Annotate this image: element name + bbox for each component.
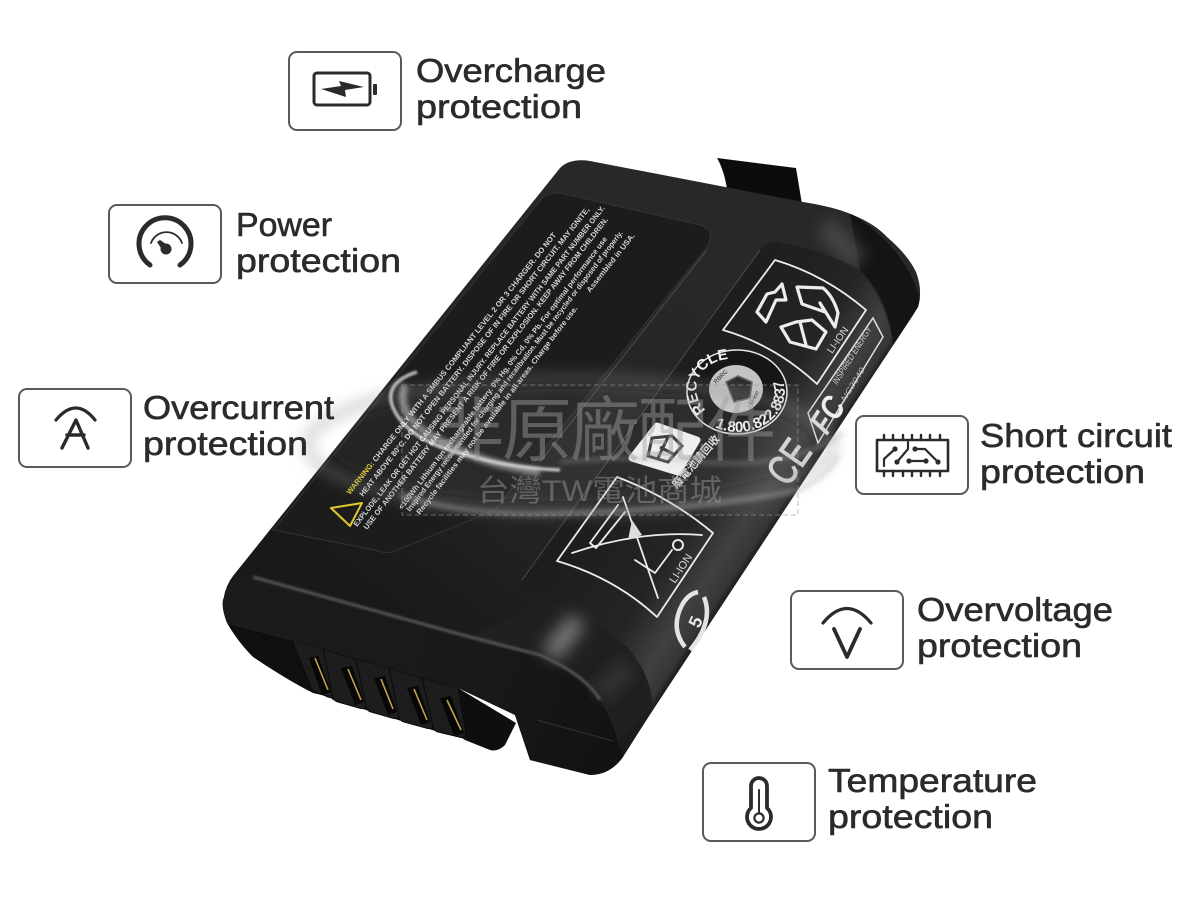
label bbox=[416, 52, 606, 125]
connector teeth bbox=[292, 640, 466, 738]
label: Overcurrent bbox=[143, 389, 334, 426]
icon: ampere bbox=[56, 408, 95, 448]
connector slots bbox=[309, 656, 464, 736]
icon box bbox=[19, 389, 131, 467]
RBRC recycle seal: Li-ion bbox=[749, 390, 761, 406]
label: Overcharge bbox=[416, 52, 606, 89]
label bbox=[236, 206, 401, 279]
warning triangle bbox=[331, 503, 362, 526]
label edge highlights bbox=[522, 250, 760, 580]
battery strap tab bbox=[717, 158, 802, 204]
connector block bbox=[292, 640, 516, 750]
warning text on label: Assembled in USA. bbox=[585, 231, 637, 294]
feature: power protection bbox=[109, 205, 401, 283]
certification label panel bbox=[520, 242, 893, 707]
lower seam line bbox=[537, 720, 613, 741]
label: Power bbox=[236, 206, 332, 243]
warning text on label: <100Wh Lithium Ion rechargeable battery. 0% Hg, 0% Cd, 0% Pb. For optimal performance use bbox=[396, 235, 609, 511]
icon: voltage bbox=[823, 608, 871, 657]
CE mark: CE bbox=[757, 430, 821, 493]
FCC certification box: NC2040 bbox=[839, 365, 867, 403]
watermark main text: 非原廠配件 bbox=[434, 392, 776, 470]
label bbox=[143, 389, 334, 462]
battery body bbox=[223, 160, 920, 775]
icon box bbox=[791, 591, 903, 669]
label bbox=[980, 417, 1172, 490]
five-year recycling mark: 5 bbox=[684, 613, 707, 631]
label: protection bbox=[828, 798, 993, 835]
end cap shoulder with highlight bbox=[534, 608, 646, 704]
front ridge highlight bbox=[253, 577, 600, 700]
feature: short circuit protection bbox=[856, 416, 1172, 494]
feature: overcharge protection bbox=[289, 52, 606, 130]
battery photo illustration bbox=[222, 158, 920, 775]
icon: thermometer bbox=[747, 778, 771, 829]
warning text on label: Inspired Energy recommended for charging and recalibration. Must be recycled or disposed of properly. bbox=[404, 229, 625, 513]
watermark bbox=[402, 385, 798, 515]
battery top end cap bbox=[825, 213, 922, 345]
label: Temperature bbox=[828, 762, 1037, 799]
five-year recycling mark bbox=[677, 592, 707, 650]
label: protection bbox=[143, 425, 308, 462]
warning text on label: HEAT ABOVE 80°C. DO NOT OPEN BATTERY. DISPOSE OF IN FIRE OR SHORT CIRCUIT. MAY IGNITE, bbox=[358, 205, 591, 498]
icon box bbox=[703, 763, 815, 841]
label: protection bbox=[917, 627, 1082, 664]
label bbox=[917, 591, 1113, 664]
feature: temperature protection bbox=[703, 762, 1037, 841]
label: protection bbox=[416, 88, 582, 125]
watermark glow ring bbox=[308, 372, 843, 514]
icon: circuit board bbox=[877, 435, 948, 476]
watermark dashed frame bbox=[402, 385, 798, 515]
front rounded end bbox=[223, 577, 623, 775]
label: protection bbox=[980, 453, 1145, 490]
icon: gauge bbox=[139, 218, 191, 265]
crossed-out bin mark: LI-ION bbox=[667, 552, 695, 586]
RBRC recycle seal: RECYCLE bbox=[686, 348, 728, 416]
label bbox=[828, 762, 1037, 835]
label: Overvoltage bbox=[917, 591, 1113, 628]
lower left shell bbox=[227, 623, 330, 697]
warning label panel bbox=[273, 193, 710, 553]
RBRC recycle seal bbox=[686, 348, 788, 435]
warning text on label: Recycle facilities may not be available in all areas. Charge before use. bbox=[414, 304, 580, 516]
label: protection bbox=[236, 242, 401, 279]
warning text on label: USE OF ANOTHER BATTERY MAY PRESENT A RISK OF FIRE OR EXPLOSION. KEEP AWAY FROM CHILDREN. bbox=[361, 216, 610, 531]
recycling li-ion mark bbox=[723, 260, 866, 384]
warning text on label: WARNING: CHARGE ONLY WITH A SMBUS COMPLIANT LEVEL 2 OR 3 CHARGER. DO NOT bbox=[345, 231, 558, 496]
RBRC recycle seal: RBRC bbox=[713, 369, 730, 385]
gold contact pins bbox=[315, 658, 461, 730]
FCC certification box: INSPIRED ENERGY bbox=[830, 324, 874, 386]
RBRC recycle seal: 1.800.822.8837 bbox=[716, 382, 785, 432]
label: Short circuit bbox=[980, 417, 1172, 454]
warning text on label: EXPLODE, LEAK OR GET HOT CAUSING PERSONAL INJURY. REPLACE BATTERY WITH SAME PART NUMBER ONLY. bbox=[351, 204, 607, 528]
recycling li-ion mark: LI-ION bbox=[825, 325, 851, 356]
FCC certification box bbox=[802, 318, 883, 443]
taiwan recycling mark: 廢電池請回收 bbox=[669, 432, 723, 491]
watermark sub text: 台灣TW電池商城 bbox=[477, 475, 722, 508]
icon box bbox=[289, 52, 401, 130]
feature: overvoltage protection bbox=[791, 591, 1113, 669]
FCC certification box: FC bbox=[802, 389, 853, 440]
icon box bbox=[109, 205, 221, 283]
icon box bbox=[856, 416, 968, 494]
icon: battery with lightning bolt bbox=[314, 73, 377, 105]
feature: overcurrent protection bbox=[19, 389, 334, 467]
crossed-out bin mark bbox=[557, 477, 713, 617]
taiwan recycling mark bbox=[632, 426, 723, 491]
